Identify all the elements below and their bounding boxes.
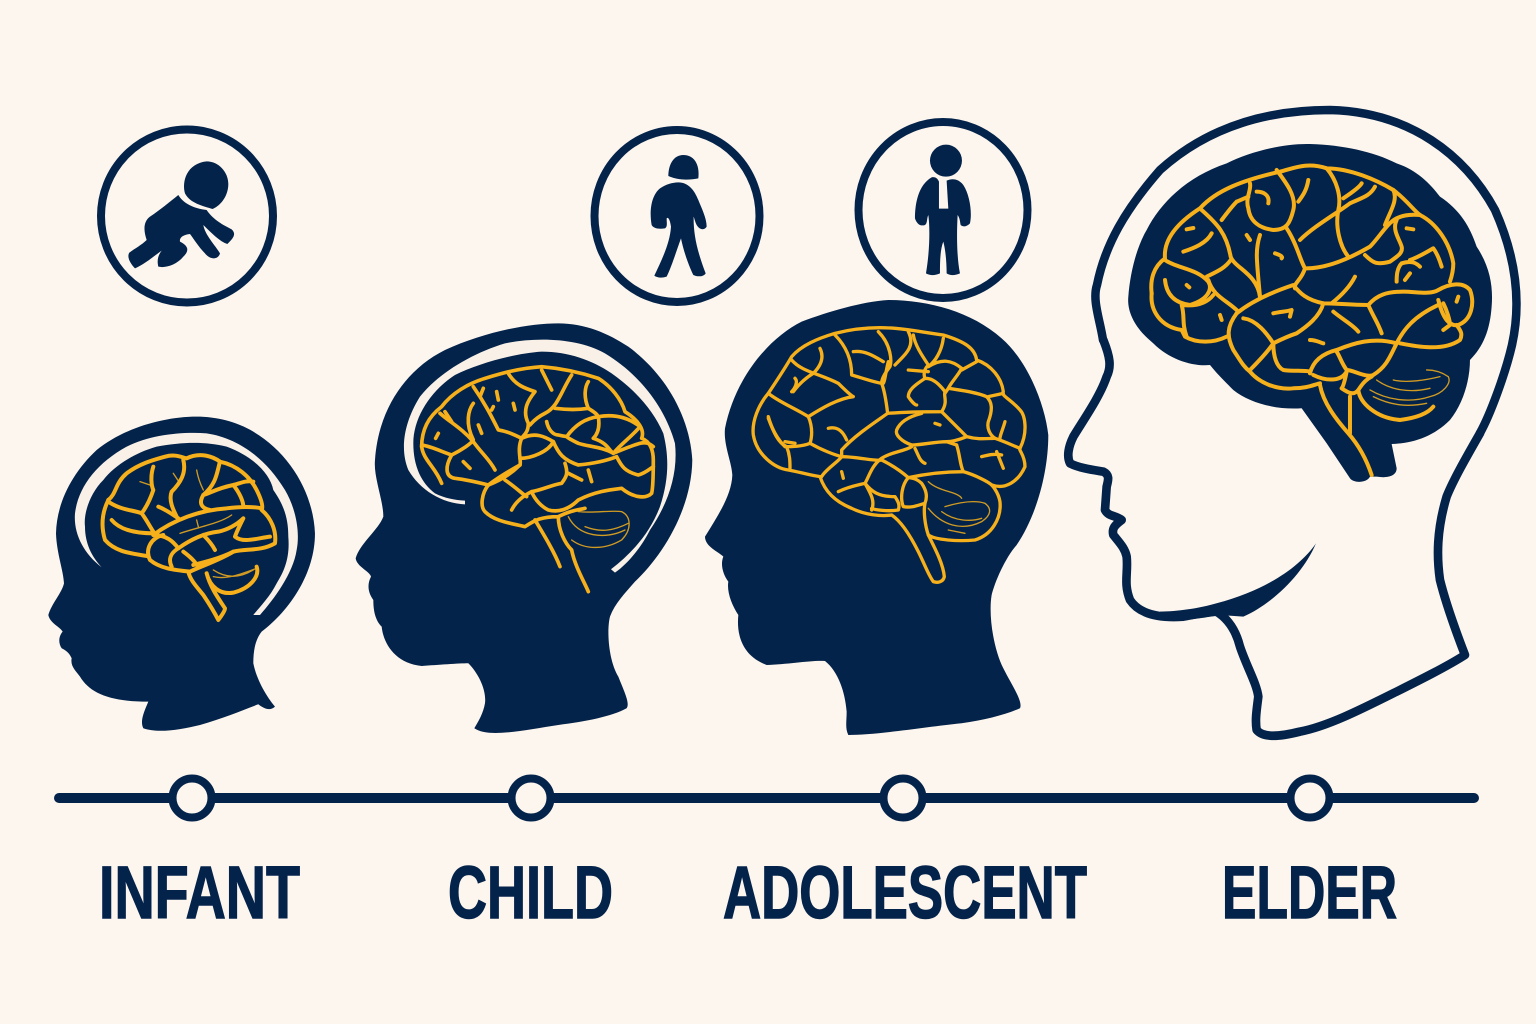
label: elder: ELDER — [1222, 851, 1397, 934]
elder brain shape — [1128, 144, 1492, 482]
elder jaw line — [1160, 543, 1316, 620]
adolescent head silhouette — [705, 300, 1048, 735]
child cream arc — [404, 340, 676, 573]
node: infant — [172, 778, 212, 818]
infant cream arc — [75, 433, 298, 615]
child head silhouette — [356, 323, 692, 733]
infant brain lines — [103, 455, 275, 620]
child head with brain — [356, 323, 692, 733]
elder head with brain — [1068, 110, 1517, 736]
node: elder — [1290, 778, 1330, 818]
label: infant: INFANT — [99, 851, 300, 934]
label: child: CHILD — [448, 851, 613, 934]
node: child — [512, 778, 550, 818]
label: adolescent: ADOLESCENT — [723, 851, 1087, 934]
infant head silhouette — [48, 417, 315, 731]
infant head with brain — [48, 417, 315, 731]
elder face and neck outline — [1068, 340, 1480, 736]
elder head upper outline — [1095, 110, 1517, 433]
icon: standing adolescent in circle — [858, 122, 1028, 298]
adolescent brain lines — [753, 328, 1025, 582]
adolescent head with brain — [705, 300, 1048, 735]
icon: crawling baby in circle — [101, 130, 273, 302]
icon: walking child in circle — [594, 130, 760, 302]
timeline — [59, 778, 1474, 818]
child brain lines — [422, 367, 653, 592]
node: adolescent — [884, 778, 922, 818]
elder brain lines — [1151, 165, 1472, 475]
